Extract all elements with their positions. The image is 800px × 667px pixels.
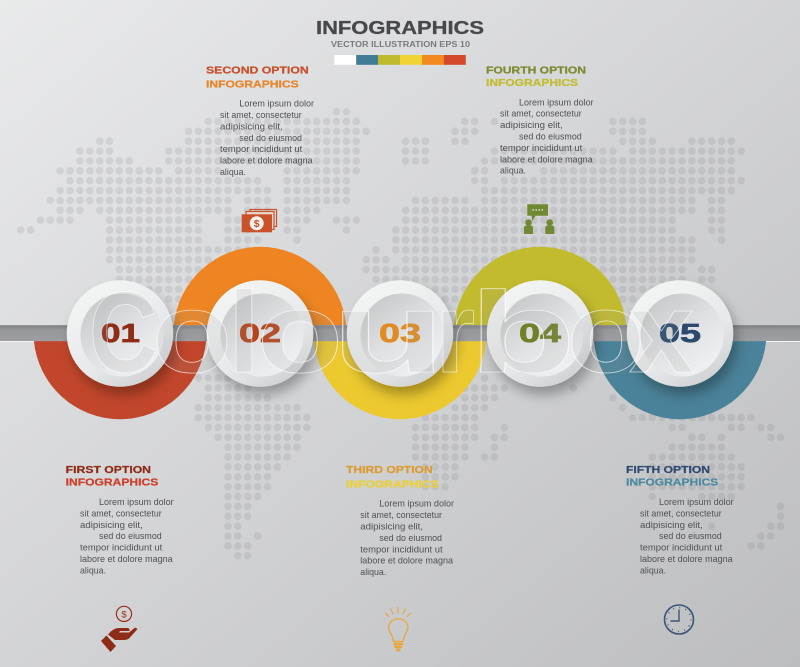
circle: step 3: 03 — [379, 320, 421, 348]
panel: third option: labore et dolore magna — [360, 556, 454, 566]
panel: fifth option: INFOGRAPHICS — [626, 477, 718, 489]
panel: first option: INFOGRAPHICS — [66, 476, 158, 488]
arc: teal step 5 — [594, 341, 766, 419]
panel: third option — [346, 464, 454, 577]
panel: third option: sed do eiusmod — [379, 533, 442, 543]
arc: orange step 2 — [174, 247, 346, 325]
panel: fourth option: sed do eiusmod — [519, 132, 582, 142]
panel: second option: SECOND OPTION — [206, 64, 309, 76]
watermark: u — [331, 269, 446, 397]
icon: hand with coin — [101, 606, 138, 652]
panel: first option: tempor incididunt ut — [80, 543, 163, 553]
icon: money bills — [242, 210, 276, 232]
arc: yellow step 3 — [314, 341, 486, 419]
panel: fifth option: aliqua. — [640, 565, 666, 575]
panel: first option: aliqua. — [80, 565, 106, 575]
circle: step 2 — [207, 280, 313, 387]
panel: first option: adipisicing elit, — [80, 520, 143, 530]
panel: fifth option: Lorem ipsum dolor — [659, 497, 734, 507]
panel: second option: adipisicing elit, — [220, 121, 283, 131]
circle: step 4 — [487, 280, 593, 387]
watermark: o — [257, 269, 343, 397]
icon: light bulb — [385, 607, 411, 650]
panel: first option: sit amet, consectetur — [80, 508, 162, 518]
circle: step 3 — [347, 280, 453, 387]
panel: fifth option: sed do eiusmod — [659, 531, 722, 541]
panel: fourth option: FOURTH OPTION — [486, 64, 586, 76]
panel: third option: aliqua. — [360, 567, 386, 577]
panel: first option: labore et dolore magna — [80, 554, 173, 564]
panel: fifth option: adipisicing elit, — [640, 520, 703, 530]
panel: first option: FIRST OPTION — [66, 464, 151, 476]
panel: fifth option — [626, 464, 734, 575]
circle: step 1: 01 — [101, 320, 140, 348]
panel: second option: sed do eiusmod — [239, 133, 302, 143]
panel: fourth option: tempor incididunt ut — [500, 143, 583, 153]
panel: fifth option: labore et dolore magna — [640, 554, 733, 564]
panel: fourth option: aliqua. — [500, 166, 526, 176]
arc: red step 1 — [34, 341, 206, 419]
circle: step 1 — [67, 280, 173, 387]
panel: fifth option: sit amet, consectetur — [640, 508, 722, 518]
panel: fourth option: Lorem ipsum dolor — [519, 97, 594, 107]
panel: fifth option: FIFTH OPTION — [626, 464, 710, 476]
panel: fourth option: sit amet, consectetur — [500, 109, 582, 119]
panel: first option: Lorem ipsum dolor — [99, 497, 174, 507]
arc: olive step 4 — [454, 247, 626, 325]
panel: second option: tempor incididunt ut — [220, 144, 303, 154]
panel: second option: labore et dolore magna — [220, 156, 313, 166]
icon: money bills: $ — [254, 218, 260, 230]
panel: fourth option: adipisicing elit, — [500, 120, 563, 130]
dotted world map — [21, 112, 781, 556]
panel: second option — [206, 64, 314, 177]
circle: step 4: 04 — [519, 320, 562, 348]
panel: third option: adipisicing elit, — [360, 522, 423, 532]
icon: clock — [664, 605, 694, 634]
icon: hand with coin: $ — [121, 609, 127, 620]
watermark: l — [228, 269, 260, 397]
circle: step 5: 05 — [659, 320, 701, 348]
panel: fourth option: INFOGRAPHICS — [486, 77, 578, 89]
panel: fourth option: labore et dolore magna — [500, 154, 593, 164]
title — [316, 18, 484, 49]
panel: third option: tempor incididunt ut — [360, 544, 443, 554]
panel: second option: INFOGRAPHICS — [206, 78, 299, 90]
title: VECTOR ILLUSTRATION EPS 10 — [331, 40, 471, 49]
watermark: r — [436, 269, 475, 397]
title: INFOGRAPHICS — [316, 18, 484, 38]
panel: second option: aliqua. — [220, 167, 246, 177]
panel: fifth option: tempor incididunt ut — [640, 543, 723, 553]
panel: first option — [66, 464, 174, 575]
circle: step 2: 02 — [239, 320, 281, 348]
panel: third option: sit amet, consectetur — [360, 510, 442, 520]
panel: second option: sit amet, consectetur — [220, 110, 302, 120]
watermark: o — [567, 269, 645, 397]
panel: third option: THIRD OPTION — [346, 464, 433, 476]
panel: second option: Lorem ipsum dolor — [239, 99, 314, 109]
panel: first option: sed do eiusmod — [99, 531, 162, 541]
watermark: b — [469, 269, 576, 397]
watermark — [89, 269, 694, 397]
panel: third option: INFOGRAPHICS — [346, 478, 439, 490]
circle: step 5 — [627, 280, 733, 387]
panel: fourth option — [486, 64, 594, 176]
timeline bar — [0, 325, 800, 342]
icon: chat people — [524, 204, 554, 234]
watermark: x — [629, 269, 694, 397]
watermark: o — [152, 269, 232, 397]
panel: third option: Lorem ipsum dolor — [379, 499, 454, 509]
colour legend bar — [334, 55, 466, 65]
watermark: C — [89, 269, 158, 397]
